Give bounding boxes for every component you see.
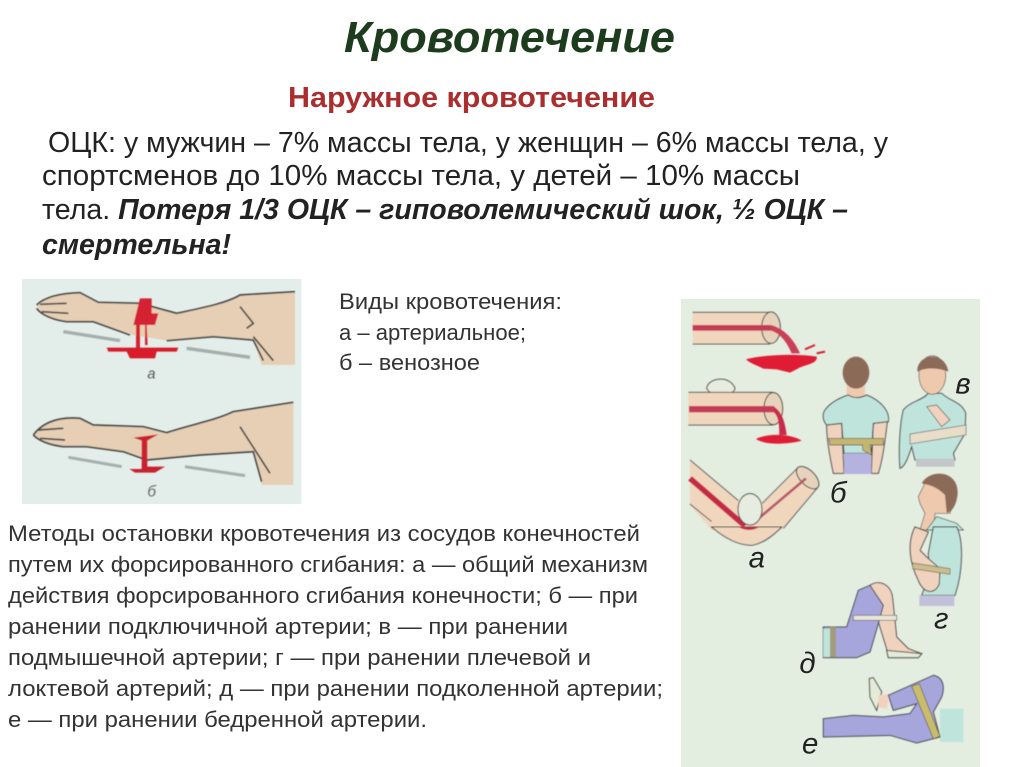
arm a: arterial bleeding: а xyxy=(147,366,155,382)
text block: methods xyxy=(8,521,663,732)
figure: front view with arms crossed xyxy=(899,356,966,468)
vessel: flexed xyxy=(690,460,823,530)
caption: bleeding types xyxy=(339,289,562,375)
text block: methods: ранении подключичной артерии; в — при ранении xyxy=(8,614,568,639)
title: Кровотечение xyxy=(344,13,675,62)
vessel: open wound xyxy=(693,312,825,373)
text block: methods: е — при ранении бедренной артерии. xyxy=(8,707,427,732)
text block: blood volume xyxy=(42,127,889,261)
text block: methods: Методы остановки кровотечения из сосудов конечностей xyxy=(8,521,640,546)
text block: methods: действия форсированного сгибания конечности; б — при xyxy=(8,583,638,608)
label: а: а xyxy=(749,542,765,575)
caption: bleeding types: а – артериальное; xyxy=(339,320,526,345)
text block: methods: подмышечной артерии; г — при ранении плечевой и xyxy=(8,645,591,670)
upper illustrations xyxy=(688,312,971,530)
subtitle: Наружное кровотечение xyxy=(288,82,655,114)
text block: methods: локтевой артерий; д — при ранении подколенной артерии; xyxy=(8,676,663,701)
arm a: arterial bleeding xyxy=(37,292,295,382)
figure: arm flexion with belt xyxy=(910,527,961,606)
illustration: arm bleeding types xyxy=(22,279,301,504)
figure: head in profile xyxy=(918,474,963,530)
label: б: б xyxy=(830,477,848,510)
text block: blood volume: смертельна! xyxy=(42,229,231,261)
vessel bend bottom xyxy=(712,527,782,545)
text block: blood volume: спортсменов до 10% массы тела, у детей – 10% массы xyxy=(42,160,800,192)
vessel: pressure applied xyxy=(688,379,802,444)
label: в: в xyxy=(955,367,971,400)
caption: bleeding types: Виды кровотечения: xyxy=(339,289,562,314)
label: д: д xyxy=(799,647,816,680)
arm b: venous bleeding xyxy=(33,402,293,501)
lower illustrations xyxy=(712,527,963,761)
figure: back view with belt xyxy=(823,357,889,474)
figure: knee flexion xyxy=(823,583,922,658)
text block: blood volume: тела. Потеря 1/3 ОЦК – гиповолемический шок, ½ ОЦК – xyxy=(42,194,848,226)
label: е: е xyxy=(802,728,818,761)
text block: blood volume: ОЦК: у мужчин – 7% массы тела, у женщин – 6% массы тела, у xyxy=(48,127,889,159)
panel: flexion methods illustration xyxy=(681,299,980,767)
text block: methods: путем их форсированного сгибания: а — общий механизм xyxy=(8,552,648,577)
figure: hip flexion xyxy=(823,675,963,743)
label: г: г xyxy=(934,602,948,635)
arm b: venous bleeding: б xyxy=(147,484,157,501)
caption: bleeding types: б – венозное xyxy=(339,350,480,375)
